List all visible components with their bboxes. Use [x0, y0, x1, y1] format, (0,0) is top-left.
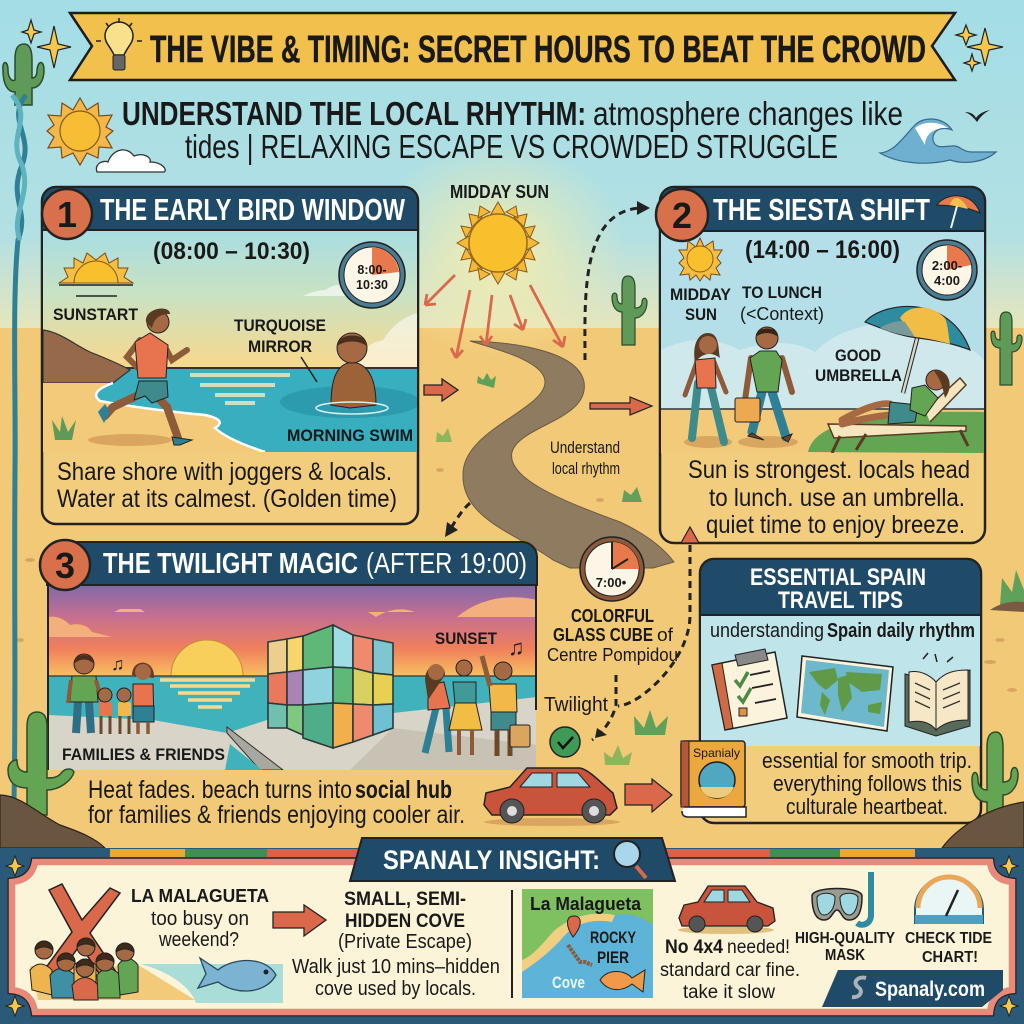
text: high-quality mask: MASK	[825, 947, 865, 964]
badge logo	[852, 978, 866, 997]
label: turquoise mirror: TURQUOISE	[234, 316, 326, 335]
badge: Spanaly.com	[822, 970, 1003, 1007]
icon: crowd with red X	[30, 884, 283, 1003]
panel 3 side borders	[48, 585, 536, 770]
label: midday sun	[670, 285, 732, 324]
label: twilight: Twilight	[544, 694, 608, 716]
label: morning swim: MORNING SWIM	[287, 426, 413, 445]
insight banner	[350, 838, 675, 881]
label: good umbrella: UMBRELLA	[815, 366, 902, 385]
text: no 4x4 needed	[660, 937, 800, 1003]
icon: sun top left	[47, 98, 113, 165]
label: midday sun: MIDDAY	[670, 285, 732, 304]
icon: fish	[198, 958, 276, 991]
scene: sunset with glass cube	[48, 585, 537, 770]
icon: midday sun small	[679, 238, 722, 281]
panel 4 subheading	[710, 620, 975, 642]
panel 4 header	[700, 559, 981, 615]
text: high-quality mask	[795, 930, 895, 964]
panel 4 heading: ESSENTIAL SPAIN	[750, 564, 926, 591]
label: turquoise mirror: MIRROR	[248, 337, 312, 356]
arrow: to siesta	[590, 397, 652, 415]
label: to lunch: TO LUNCH	[742, 283, 822, 302]
icon: clock 8:00-10:30	[339, 242, 405, 308]
icon: clock 7:00: 7:00•	[596, 575, 627, 590]
panel 1 body text: Water at its calmest. (Golden time)	[57, 485, 397, 513]
icon: snorkel mask	[812, 872, 871, 925]
panel 1 heading: THE EARLY BIRD WINDOW	[100, 192, 406, 227]
map label cove: Cove	[552, 973, 585, 992]
label: colorful glass cube: of	[657, 625, 674, 645]
icon: music note right: ♫	[508, 635, 524, 660]
panel 2 body text: Sun is strongest. locals head	[688, 456, 970, 484]
panel 4 body text	[762, 748, 972, 819]
panel 4 body text: culturale heartbeat.	[786, 794, 948, 819]
number badge 2: 2	[672, 195, 692, 236]
map label rocky pier: ROCKY	[590, 928, 636, 947]
divider	[511, 890, 513, 998]
label: sunstart: SUNSTART	[53, 305, 139, 324]
icon: small car	[678, 886, 775, 934]
arrow: to road	[424, 379, 458, 401]
panel 4 subheading: Spain daily rhythm	[827, 620, 975, 642]
panel 4 heading: TRAVEL TIPS	[778, 587, 903, 614]
arrow: busy to cove	[273, 905, 326, 936]
figure: woman walking	[685, 333, 726, 442]
icon: small cactus right	[991, 312, 1022, 385]
panel 3 body text: for families & friends enjoying cooler air.	[88, 801, 465, 829]
text: hidden cove: cove used by locals.	[315, 978, 476, 1000]
panel 1 header	[42, 187, 418, 230]
subtitle: atmosphere changes like	[593, 95, 903, 132]
text: no 4x4 needed: No 4x4	[665, 937, 723, 958]
label: colorful glass cube: Centre Pompidou	[547, 645, 678, 665]
panel 1: early bird window	[42, 187, 420, 524]
icon: bottom right cactus and rock	[942, 732, 1024, 848]
icon: check mark	[550, 727, 580, 757]
badge text: Spanaly.com	[875, 978, 985, 1001]
text: hidden cove: SMALL, SEMI-	[344, 889, 466, 910]
panel 4: essential travel tips	[700, 559, 981, 823]
number badge 3: 3	[55, 545, 75, 586]
text: La Malagueta: weekend?	[158, 929, 239, 951]
map label rocky pier	[590, 928, 636, 967]
figure: friends group	[425, 656, 530, 756]
icon: clock 8:00-10:30: 8:00-	[357, 263, 387, 277]
panel 4 heading	[750, 564, 926, 614]
insight heading: SPANALY INSIGHT:	[383, 845, 600, 875]
icon: sparkles right	[956, 25, 1003, 71]
text: no 4x4 needed: needed!	[727, 937, 790, 958]
icon: clock 2:00-4:00	[917, 240, 977, 300]
label: sunset: SUNSET	[435, 629, 498, 648]
arrow: dashed lines	[451, 208, 690, 740]
text: no 4x4 needed: take it slow	[683, 982, 775, 1003]
icon: clipboard	[712, 649, 787, 730]
text: hidden cove: HIDDEN COVE	[345, 911, 465, 932]
text: check tide chart: CHECK TIDE	[905, 930, 992, 947]
label: to lunch: (<Context)	[740, 304, 824, 324]
road	[463, 341, 674, 568]
number badge 1: 1	[57, 194, 77, 235]
scene: beach morning	[43, 231, 420, 452]
panel 3 header	[47, 542, 537, 585]
icon: open book	[905, 653, 970, 736]
label: understand local rhythm	[550, 438, 620, 478]
number badge 1	[42, 189, 92, 239]
icon: sunrise	[59, 253, 133, 296]
icon: header umbrella	[937, 196, 980, 228]
text: check tide chart: CHART!	[922, 949, 978, 966]
icon: plants	[436, 373, 1024, 765]
panel 4 body text: everything follows this	[773, 771, 962, 796]
label: families and friends: FAMILIES & FRIENDS	[62, 745, 225, 764]
text: high-quality mask: HIGH-QUALITY	[795, 930, 895, 947]
figure: man walking	[735, 327, 792, 442]
map title: La Malagueta	[530, 894, 642, 914]
colored stripes	[110, 849, 915, 857]
subtitle	[122, 95, 903, 165]
label: colorful glass cube: GLASS CUBE	[553, 625, 653, 645]
text: hidden cove	[292, 889, 500, 1000]
figure: family	[68, 654, 154, 734]
icon: left cactus and twisted rope	[3, 44, 44, 800]
icon: clock 8:00-10:30: 10:30	[356, 278, 388, 292]
panel 2: siesta shift	[656, 187, 985, 543]
icon: gauge	[915, 876, 983, 924]
panel 2 header	[660, 187, 985, 231]
icon: small cactus middle	[612, 276, 647, 345]
icon: bottom left cactus and rock	[0, 712, 105, 848]
text: La Malagueta	[131, 886, 269, 951]
label: good umbrella: GOOD	[835, 346, 881, 365]
label: colorful glass cube	[547, 606, 678, 665]
icon: clock 7:00	[580, 537, 644, 601]
text: La Malagueta: too busy on	[151, 908, 249, 930]
arrowheads: dashed arrows	[445, 201, 650, 738]
icon: cove map	[522, 889, 653, 998]
panel 2 time: (14:00 – 16:00)	[745, 236, 900, 264]
figure: glass cube	[268, 625, 393, 748]
panel 3 body text: Heat fades. beach turns into	[88, 776, 352, 804]
number badge 2	[656, 189, 708, 241]
panel 2 body text	[688, 456, 970, 539]
icon: clock 2:00-4:00: 2:00-	[932, 258, 962, 273]
panel 3 body text	[88, 776, 465, 829]
label: midday sun: MIDDAY SUN	[450, 182, 549, 202]
text: hidden cove: Walk just 10 mins–hidden	[292, 956, 500, 978]
subtitle: UNDERSTAND THE LOCAL RHYTHM:	[122, 95, 586, 132]
panel 1 body text: Share shore with joggers & locals.	[57, 458, 392, 486]
label: to lunch	[740, 283, 824, 324]
figure: swimmer	[316, 333, 388, 414]
icon: world map	[797, 656, 893, 731]
icon: clock 2:00-4:00: 4:00	[934, 273, 960, 288]
map fish	[600, 970, 645, 992]
sparkles in corners	[6, 856, 1018, 1016]
panel 1 body text	[57, 458, 397, 513]
icon: wave and bird	[880, 110, 996, 163]
figure: jogger	[98, 308, 192, 445]
figure: umbrella and lounger	[828, 306, 970, 453]
icon: red car	[484, 768, 620, 826]
panel 4 subheading: understanding	[710, 620, 824, 642]
icon: light bulb	[96, 18, 142, 70]
number badge 3	[40, 540, 90, 590]
icon: magnifier	[614, 841, 646, 878]
text: hidden cove: (Private Escape)	[338, 931, 472, 953]
label: midday sun: SUN	[685, 305, 717, 324]
label: colorful glass cube: COLORFUL	[571, 606, 654, 626]
text: La Malagueta: LA MALAGUETA	[131, 886, 269, 906]
icon: Spanialy book	[681, 741, 746, 817]
rock right top	[990, 602, 1024, 612]
icon: sparkles left	[22, 20, 71, 68]
icon: midday sun with arrows	[425, 202, 565, 358]
book label: Spanialy	[693, 746, 740, 760]
map label rocky pier: PIER	[597, 948, 629, 967]
icon: music note left: ♫	[111, 654, 124, 674]
panel 3 body text: social hub	[355, 776, 452, 804]
panel 4 body text: essential for smooth trip.	[762, 748, 972, 773]
icon: cloud	[96, 150, 165, 172]
scene: beach midday	[661, 231, 984, 453]
panel 2 body text: to lunch. use an umbrella.	[709, 484, 965, 512]
label: turquoise mirror	[234, 316, 326, 382]
panel 3: twilight magic	[40, 540, 537, 829]
label: understand local rhythm: local rhythm	[552, 459, 620, 478]
panel 3 heading: (AFTER 19:00)	[366, 548, 527, 580]
text: check tide chart	[905, 930, 992, 966]
arrow: car to book	[625, 779, 672, 812]
panel 1 time: (08:00 – 10:30)	[153, 238, 310, 265]
bottom section: Spanaly insight	[0, 838, 1024, 1024]
panel 2 heading: THE SIESTA SHIFT	[713, 192, 930, 227]
label: good umbrella	[815, 346, 902, 385]
insight frame	[12, 862, 1012, 1012]
subtitle: tides | RELAXING ESCAPE VS CROWDED STRUGGLE	[185, 128, 838, 165]
panel 3 heading: THE TWILIGHT MAGIC	[103, 548, 358, 580]
arrowhead: upward to siesta	[681, 527, 699, 543]
label: understand local rhythm: Understand	[550, 438, 620, 457]
panel 2 body text: quiet time to enjoy breeze.	[706, 511, 965, 539]
text: no 4x4 needed: standard car fine.	[660, 960, 800, 981]
title banner	[70, 13, 955, 80]
